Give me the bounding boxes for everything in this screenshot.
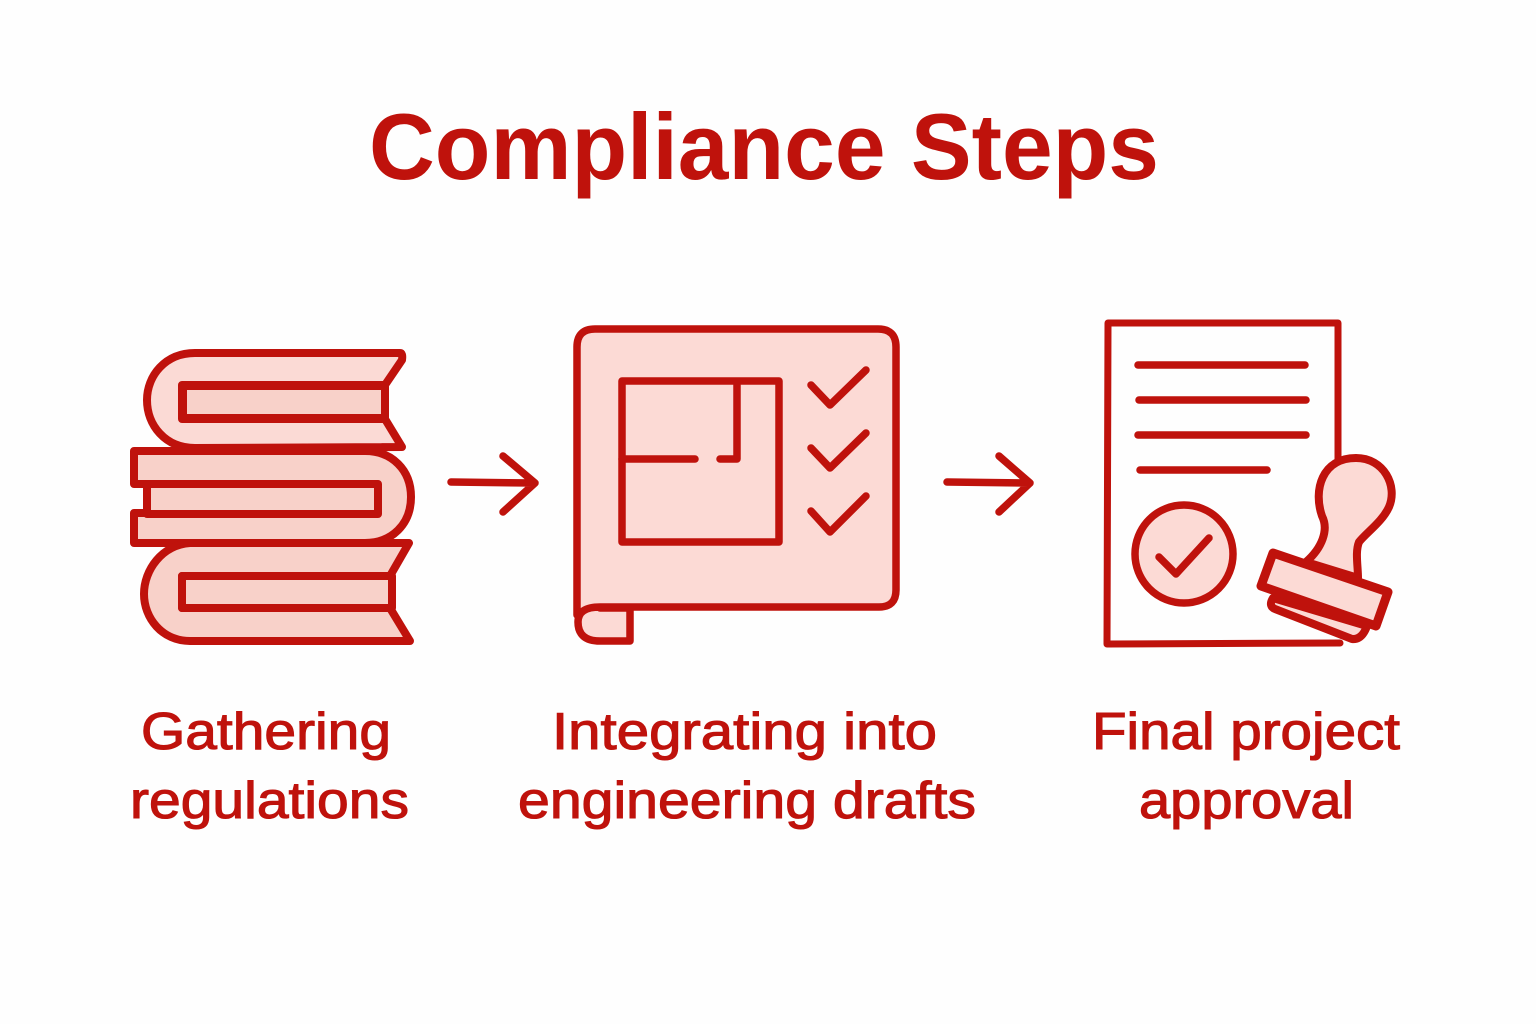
arrow: step 1 to step 2 xyxy=(451,456,535,512)
label: final project approval: approval xyxy=(1139,772,1354,830)
approval check badge xyxy=(1135,505,1233,603)
rubber stamp xyxy=(1261,458,1392,639)
label: integrating into engineering drafts: engineering drafts xyxy=(518,772,976,830)
middle book xyxy=(134,451,411,543)
blueprint sheet xyxy=(577,329,896,641)
document outline xyxy=(1107,323,1340,644)
icon: stack of books xyxy=(134,353,411,641)
floor plan xyxy=(622,381,779,542)
label: final project approval: Final project xyxy=(1092,703,1401,761)
label: gathering regulations: regulations xyxy=(130,772,409,830)
icon: approved document with stamp xyxy=(1107,323,1392,644)
label: final project approval xyxy=(1092,703,1401,830)
label: gathering regulations: Gathering xyxy=(141,703,391,761)
checklist marks xyxy=(811,370,866,532)
icon: engineering blueprint with checklist xyxy=(577,329,896,641)
label: integrating into engineering drafts xyxy=(518,703,976,830)
top book xyxy=(147,353,402,448)
label: gathering regulations xyxy=(130,703,409,830)
document text lines xyxy=(1138,365,1306,470)
bottom book xyxy=(144,543,410,641)
title: Compliance Steps xyxy=(369,94,1159,199)
label: integrating into engineering drafts: Integrating into xyxy=(552,703,937,761)
arrow: step 2 to step 3 xyxy=(947,456,1030,512)
